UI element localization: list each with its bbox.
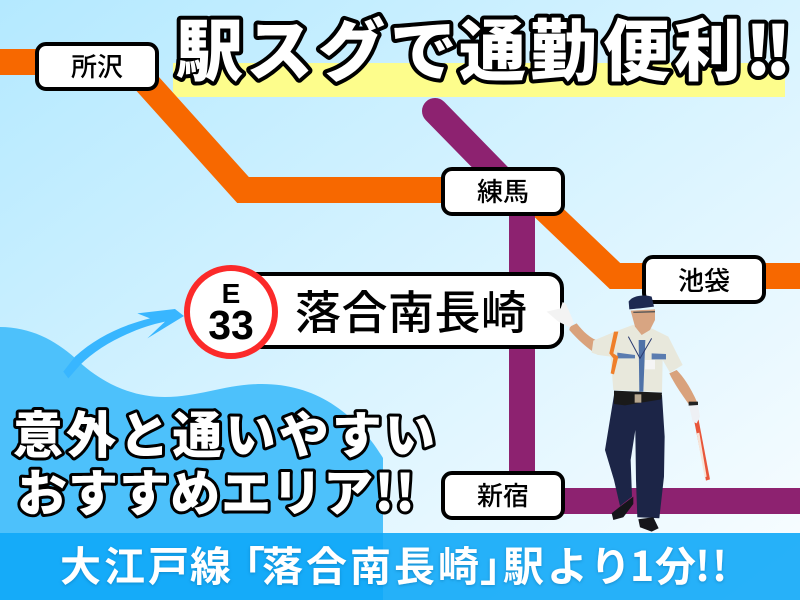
- station number badge: E33: [187, 268, 275, 356]
- glove: [547, 302, 574, 327]
- station label: 池袋: [644, 257, 764, 302]
- shoe right: [638, 517, 659, 532]
- purple line: [435, 111, 800, 501]
- watch: [689, 402, 698, 406]
- title: 駅スグで通勤便利!!: [176, 0, 792, 95]
- bottom banner: 大江戸線「落合南長崎」駅より1分!!: [60, 533, 727, 593]
- baton: [694, 418, 710, 481]
- collar lanyard: [628, 337, 652, 358]
- station label: 練馬: [443, 169, 563, 214]
- shirt: [592, 325, 683, 392]
- name badge: [645, 360, 655, 369]
- station attendant figure: [547, 295, 710, 532]
- station label: 所沢: [37, 44, 157, 89]
- station label: 落合南長崎: 落合南長崎: [295, 277, 527, 343]
- placket: [639, 340, 645, 392]
- station label: 新宿: [443, 473, 563, 518]
- raised arm: [569, 323, 600, 355]
- glasses: [633, 310, 655, 314]
- shoe left: [612, 497, 633, 520]
- arrow: [63, 309, 184, 378]
- station label: 落合南長崎: [235, 274, 562, 347]
- face: [631, 309, 655, 335]
- blue wave: [0, 327, 383, 600]
- trousers: [605, 395, 665, 518]
- station number badge: E33: E: [222, 278, 240, 309]
- station label: 池袋: 池袋: [678, 261, 730, 298]
- belt: [614, 391, 662, 405]
- cap: [629, 295, 654, 309]
- orange line: [0, 62, 800, 276]
- station label: 所沢: 所沢: [71, 47, 123, 84]
- shirt pocket flaps: [617, 353, 666, 359]
- armband: [609, 332, 618, 374]
- station number badge: E33: 33: [208, 302, 254, 348]
- highlight band: [173, 63, 785, 97]
- station label: 練馬: 練馬: [477, 172, 529, 209]
- lowered arm: [669, 370, 697, 405]
- station label: 新宿: 新宿: [477, 476, 529, 513]
- subheading line 2: おすすめエリア!!: [17, 454, 415, 526]
- second glove: [689, 405, 700, 423]
- subheading line 1: 意外と通いやすい: [13, 396, 435, 468]
